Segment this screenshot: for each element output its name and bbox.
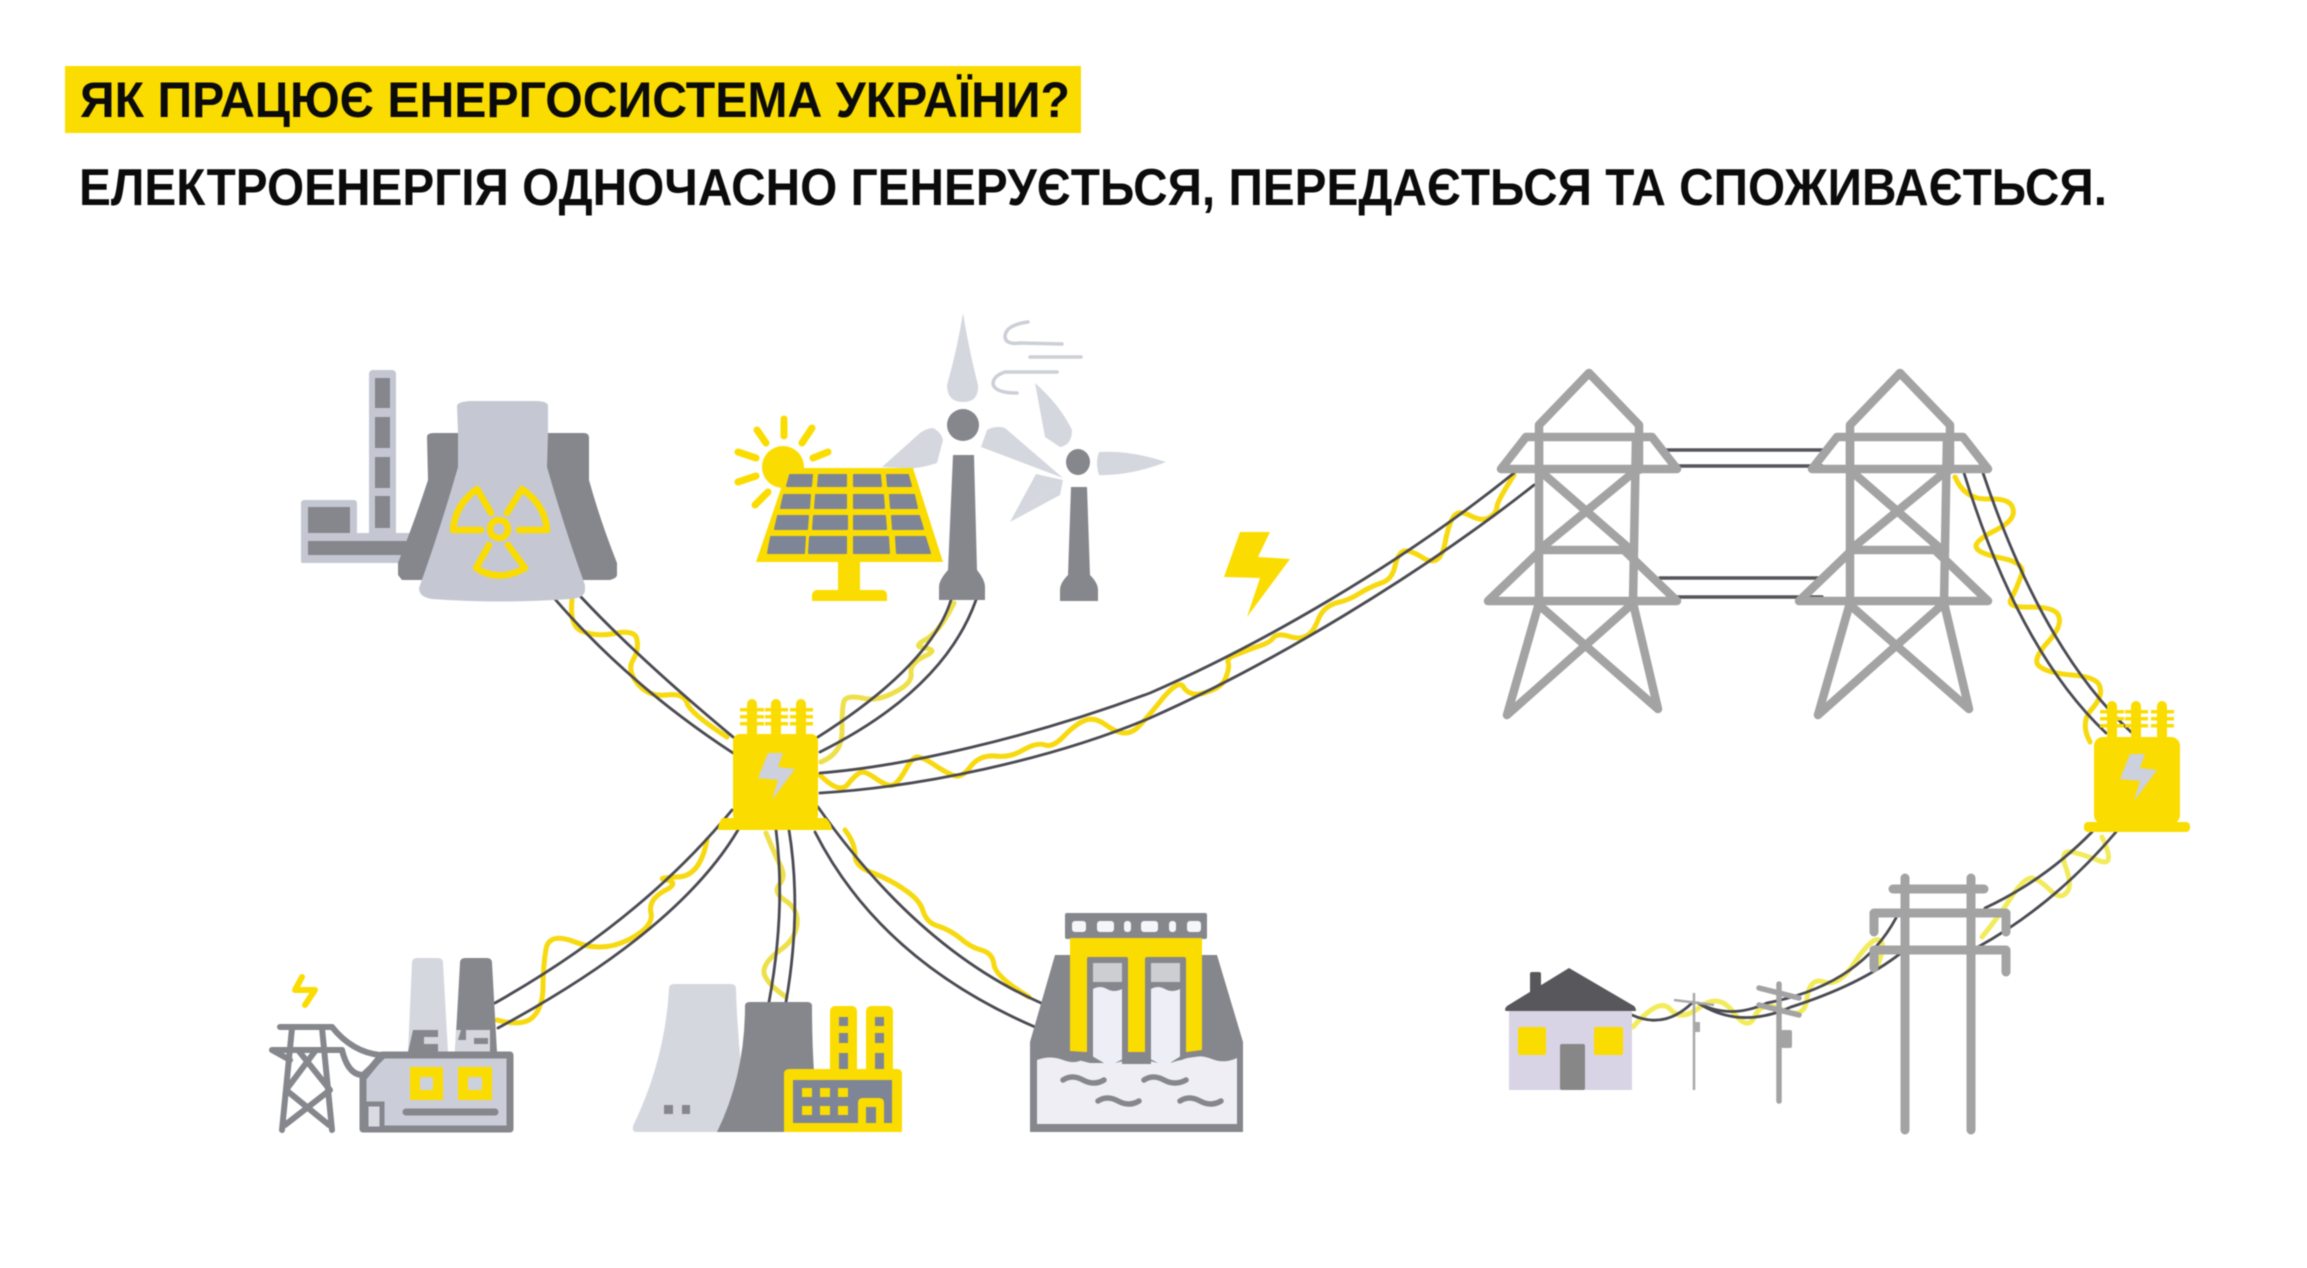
icon: right transformer (2084, 701, 2190, 832)
tower windows (664, 1105, 690, 1114)
icon: hydroelectric dam (1030, 913, 1243, 1132)
icon: central transformer (718, 699, 832, 830)
large turbine (882, 313, 1063, 600)
gates with falling water (1087, 957, 1186, 1064)
power cables (495, 450, 2131, 1028)
dam body (1030, 955, 1243, 1132)
icon: lightning bolt (1224, 532, 1290, 617)
icon: nuclear power plant (301, 370, 617, 602)
wind lines (993, 322, 1081, 393)
body (2094, 737, 2180, 824)
icon: small utility pole (1674, 993, 1714, 1090)
front cooling tower (419, 401, 585, 602)
dark cooling tower (717, 1002, 820, 1132)
energy waves along cables (497, 475, 2109, 1027)
icon: large utility pole (1874, 878, 2006, 1130)
water mounds (1070, 1050, 1202, 1063)
generator building (363, 1055, 510, 1129)
rear cooling tower (398, 433, 617, 580)
bolt (758, 753, 795, 800)
small bolt (295, 977, 315, 1005)
water (1037, 1050, 1237, 1124)
chimneys (408, 958, 497, 1052)
icon: house (1505, 968, 1636, 1090)
yellow spillway (1070, 938, 1202, 1052)
bolt (2120, 754, 2157, 801)
pylon (272, 1027, 382, 1130)
insulators (740, 699, 813, 739)
radiation symbol (453, 489, 547, 576)
panel cells (768, 475, 930, 553)
icon: thermal power plant with pylon (272, 958, 510, 1130)
title: ЯК ПРАЦЮЄ ЕНЕРГОСИСТЕМА УКРАЇНИ? (80, 72, 1070, 128)
icon: cooling towers and factory (633, 984, 902, 1132)
icon: wind turbines (882, 313, 1166, 601)
icon: solar panel with sun (738, 419, 943, 601)
small turbine (1010, 383, 1166, 601)
sun (738, 419, 828, 505)
factory (784, 1006, 902, 1132)
panel (756, 468, 943, 562)
insulators (2100, 701, 2174, 741)
icon: left transmission tower (1488, 373, 1677, 715)
body (733, 734, 818, 822)
subtitle: ЕЛЕКТРОЕНЕРГІЯ ОДНОЧАСНО ГЕНЕРУЄТЬСЯ, ПЕРЕДАЄТЬСЯ ТА СПОЖИВАЄТЬСЯ. (79, 159, 2107, 217)
dam top with openings (1065, 913, 1207, 939)
light cooling tower (633, 984, 750, 1132)
icon: medium utility pole (1759, 984, 1799, 1101)
icon: right transmission tower (1799, 373, 1988, 715)
stand (812, 562, 887, 601)
chimney and auxiliary building (301, 370, 416, 563)
